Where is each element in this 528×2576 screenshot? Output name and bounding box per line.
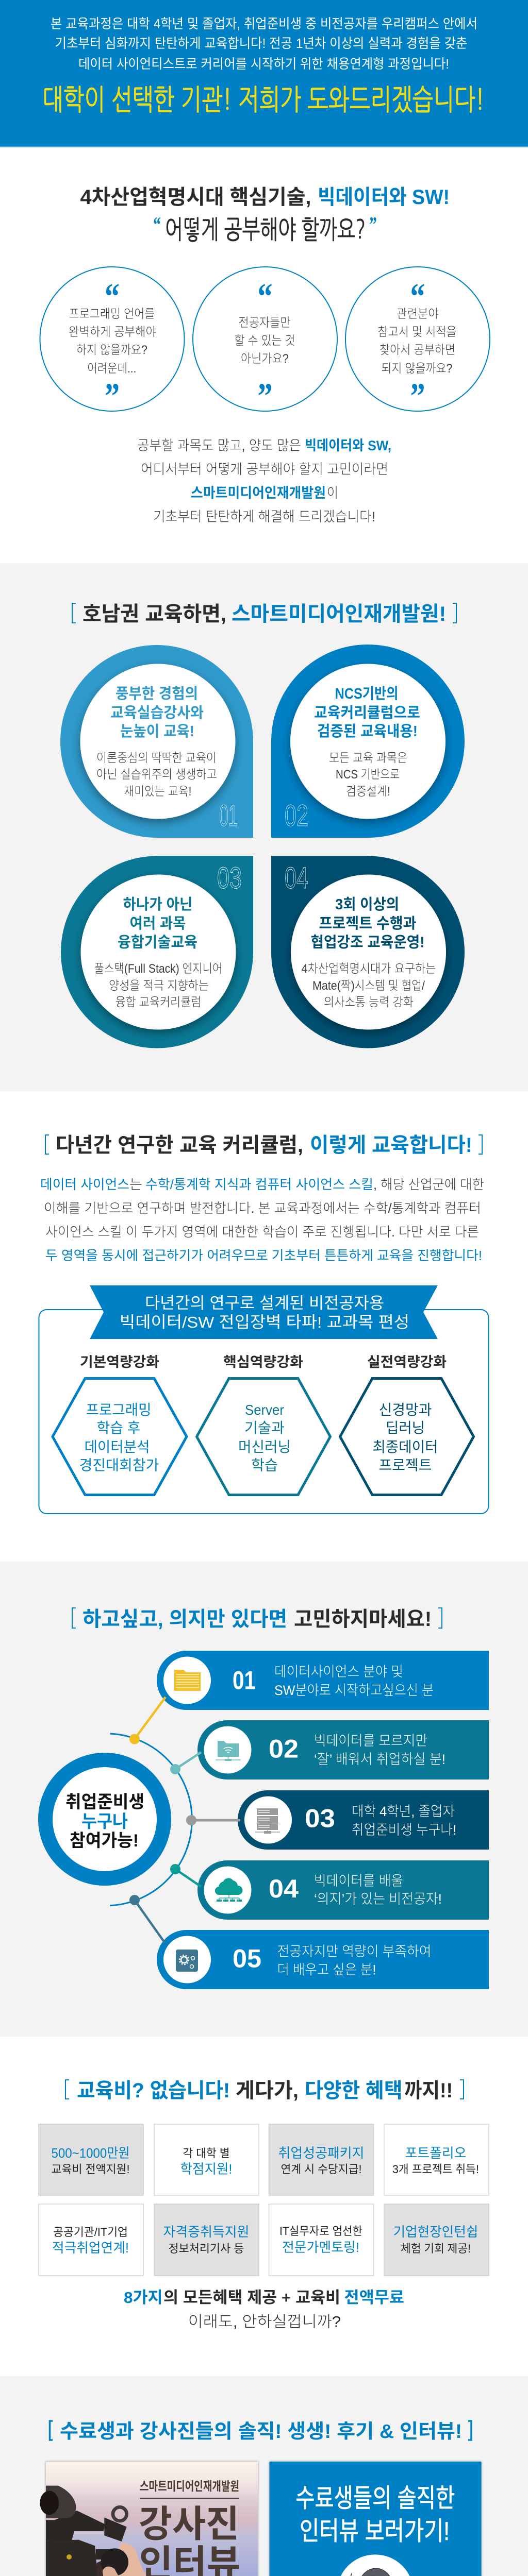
row 02: 빅데이터를 모르지만	[314, 1733, 427, 1749]
question bubble 3: 찾아서 공부하면	[380, 343, 455, 357]
section heading	[45, 1134, 482, 1157]
icon: server	[255, 1808, 280, 1834]
center badge: 참여가능!	[70, 1831, 139, 1851]
section heading: 이렇게 교육합니다!	[310, 1134, 472, 1157]
column: practical skills: 실전역량강화	[367, 1354, 447, 1370]
card 03: 융합 교육커리큘럼	[116, 995, 201, 1009]
handwritten caption: 수료생들의 솔직한	[295, 2484, 455, 2513]
question bubble 3: “	[410, 276, 425, 317]
benefit 5	[39, 2204, 143, 2276]
question bubble 2: “	[258, 276, 272, 317]
closing paragraph: 이	[327, 485, 338, 501]
section heading: 빅데이터와 SW!	[318, 186, 450, 209]
card 01	[60, 645, 253, 838]
benefits summary: 전액무료	[344, 2289, 404, 2307]
benefit 6: 자격증취득지원	[163, 2224, 250, 2240]
row 01: 01	[233, 1666, 256, 1695]
section heading: 다년간 연구한 교육 커리큘럼,	[56, 1134, 303, 1157]
card 02	[271, 645, 465, 838]
benefit 8	[384, 2204, 489, 2276]
column: core skills: Server	[245, 1402, 284, 1418]
section heading: 게다가,	[236, 2079, 299, 2102]
section heading: 수료생과 강사진들의 솔직! 생생! 후기 & 인터뷰!	[60, 2421, 462, 2443]
poster text: 강사진	[139, 2504, 239, 2545]
center badge: 누구나	[81, 1812, 128, 1832]
benefit 5: 공공기관/IT기업	[53, 2226, 128, 2239]
closing paragraph: 스마트미디어인재개발원	[191, 485, 326, 501]
question bubble 3: 관련분야	[397, 307, 439, 321]
benefits summary: 8가지	[124, 2289, 163, 2307]
column: practical skills	[340, 1354, 473, 1495]
column: basic skills: 경진대회참가	[79, 1457, 159, 1473]
card 01: 풍부한 경험의	[116, 685, 198, 702]
question bubble 3: 참고서 및 서적을	[377, 325, 457, 339]
curriculum description: 는	[129, 1177, 142, 1192]
column: core skills: 머신러닝	[238, 1439, 291, 1455]
card 02: 검증된 교육내용!	[317, 723, 418, 740]
benefit 2: 각 대학 별	[183, 2147, 230, 2160]
benefit 4	[384, 2124, 489, 2195]
column: core skills	[197, 1354, 330, 1495]
section heading	[72, 603, 456, 625]
card 04: 4차산업혁명시대가 요구하는	[301, 962, 436, 976]
row 03	[238, 1790, 489, 1850]
card 02: NCS기반의	[335, 685, 398, 702]
benefits summary: 이래도, 안하실껍니까?	[188, 2313, 341, 2331]
row 03: 03	[305, 1804, 335, 1833]
curriculum description: 데이터 사이언스	[40, 1177, 129, 1192]
section heading: 4차산업혁명시대 핵심기술,	[80, 186, 311, 209]
card 02: 검증설계!	[346, 785, 390, 799]
handwritten question: “	[153, 213, 161, 237]
column: basic skills: 프로그래밍	[86, 1402, 152, 1418]
closing paragraph: 기초부터 탄탄하게 해결해 드리겠습니다!	[153, 509, 375, 524]
curriculum frame	[39, 1310, 489, 1514]
benefit 2	[154, 2124, 259, 2195]
question bubble 1: 하지 않을까요?	[76, 343, 147, 357]
card 01: 재미있는 교육!	[124, 785, 192, 799]
section heading: 스마트미디어인재개발원!	[232, 603, 446, 625]
card 03: 풀스택(Full Stack) 엔지니어	[94, 962, 223, 976]
section: strengths	[0, 563, 528, 1091]
card 04: Mate(짝)시스템 및 협업/	[312, 979, 425, 993]
card 01: 01	[219, 799, 238, 833]
benefit 4: 3개 프로젝트 취득!	[392, 2163, 479, 2176]
handwritten question	[153, 213, 377, 243]
card 03: 하나가 아닌	[123, 896, 193, 913]
row 05	[157, 1930, 489, 1989]
icon: network folder	[216, 1741, 241, 1761]
section: curriculum	[39, 1134, 489, 1514]
row 05: 더 배우고 싶은 분!	[277, 1962, 376, 1977]
column: basic skills	[53, 1354, 187, 1495]
icon: cloud network	[215, 1878, 242, 1902]
question bubble 2: 전공자들만	[238, 316, 291, 330]
benefit 7: IT실무자로 엄선한	[279, 2225, 362, 2238]
section heading	[72, 1608, 442, 1631]
column: practical skills: 딥러닝	[386, 1420, 425, 1436]
card 01: 아닌 실습위주의 생생하고	[96, 768, 217, 782]
card 04: 04	[285, 861, 308, 895]
question bubble 2	[193, 267, 337, 417]
photo: camera operator	[40, 2486, 240, 2576]
row 02: ‘잘’ 배워서 취업하실 분!	[314, 1752, 446, 1767]
card 03	[61, 856, 253, 1048]
ribbon banner	[90, 1285, 438, 1339]
row 05: 05	[233, 1944, 261, 1973]
question bubble 1: 완벽하게 공부해야	[69, 325, 156, 339]
column: core skills: 기술과	[244, 1420, 285, 1436]
benefit 8: 체험 기회 제공!	[401, 2242, 471, 2255]
benefit 5: 적극취업연계!	[52, 2240, 129, 2256]
interview poster: graduates	[269, 2462, 482, 2576]
section heading	[65, 2079, 464, 2102]
benefit 2: 학점지원!	[180, 2161, 232, 2177]
column: basic skills: 기본역량강화	[80, 1354, 159, 1370]
question bubble 2: ”	[258, 376, 272, 417]
row 04	[197, 1860, 489, 1920]
closing paragraph: 공부할 과목도 많고, 양도 많은	[137, 438, 301, 453]
row 01: SW분야로 시작하고싶으신 분	[274, 1683, 434, 1698]
benefit 7	[269, 2204, 373, 2276]
connector lines and dots	[129, 1697, 240, 1943]
column: core skills: 핵심역량강화	[223, 1354, 303, 1370]
question bubble 1	[40, 267, 185, 417]
closing paragraph: 어디서부터 어떻게 공부해야 할지 고민이라면	[141, 462, 388, 477]
benefit 4: 포트폴리오	[405, 2145, 466, 2161]
poster text: 스마트미디어인재개발원	[140, 2480, 239, 2494]
column: core skills: 학습	[251, 1457, 278, 1473]
section heading: 하고싶고, 의지만 있다면	[82, 1608, 287, 1631]
icon: gears	[176, 1950, 198, 1972]
question bubble 1: 프로그래밍 언어를	[69, 307, 155, 321]
card 03: 여러 과목	[130, 915, 186, 932]
card 04: 협업강조 교육운영!	[310, 934, 425, 951]
section: benefits	[39, 2079, 489, 2331]
section heading: 호남권 교육하면,	[82, 603, 226, 625]
card 02: 교육커리큘럼으로	[314, 704, 420, 721]
card 01: 이론중심의 딱딱한 교육이	[96, 751, 217, 765]
section heading: 고민하지마세요!	[294, 1608, 432, 1631]
hero panel	[0, 0, 528, 147]
curriculum description: , 해당 산업군에 대한	[373, 1177, 484, 1192]
connector arc	[110, 1734, 192, 1906]
benefit 3: 연계 시 수당지급!	[280, 2163, 362, 2176]
section heading: 까지!!	[404, 2079, 453, 2102]
benefit 1: 교육비 전액지원!	[52, 2163, 130, 2176]
hero intro text	[51, 16, 477, 72]
illustration: graduates	[275, 2554, 473, 2576]
benefit 1	[39, 2124, 143, 2195]
row 04: ‘의지’가 있는 비전공자!	[314, 1891, 442, 1907]
row 01	[157, 1651, 489, 1710]
benefits summary	[124, 2289, 404, 2331]
center badge	[45, 1760, 164, 1878]
card 02: 모든 교육 과목은	[329, 751, 407, 765]
handwritten caption	[295, 2484, 455, 2546]
row 02: 02	[269, 1734, 299, 1763]
benefit 3: 취업성공패키지	[278, 2145, 364, 2161]
curriculum description: 두 영역을 동시에 접근하기가 어려우므로 기초부터 튼튼하게 교육을 진행합니다!	[45, 1248, 482, 1263]
curriculum description	[40, 1177, 484, 1263]
card 04	[271, 856, 465, 1048]
question bubble 2: 할 수 있는 것	[234, 334, 295, 348]
handwritten caption: 인터뷰 보러가기!	[300, 2517, 450, 2546]
question bubble 3	[345, 267, 490, 417]
question bubble 3: ”	[410, 376, 425, 417]
card 01: 교육실습강사와	[110, 704, 204, 721]
closing paragraph: 빅데이터와 SW,	[305, 438, 391, 453]
column: practical skills: 프로젝트	[378, 1457, 432, 1473]
hero intro text: 데이터 사이언티스트로 커리어를 시작하기 위한 채용연계형 과정입니다!	[78, 56, 449, 72]
benefit 6	[154, 2204, 259, 2276]
benefit 7: 전문가멘토링!	[282, 2240, 359, 2255]
section heading: 다양한 혜택	[305, 2079, 402, 2102]
question bubble 2: 아닌가요?	[241, 352, 289, 366]
card 04: 프로젝트 수행과	[319, 915, 417, 932]
card 02: 02	[285, 799, 308, 833]
curriculum description: 사이언스 스킬 이 두가지 영역에 대한한 학습이 주로 진행됩니다. 다만 서로 다른	[45, 1224, 479, 1240]
interview poster: instructors	[40, 2462, 258, 2576]
card 03: 03	[217, 861, 242, 895]
poster text	[139, 2480, 240, 2576]
section: how to study	[40, 186, 490, 524]
row 04: 빅데이터를 배울	[314, 1873, 403, 1889]
row 03: 취업준비생 누구나!	[352, 1822, 456, 1838]
icon: folder	[174, 1670, 201, 1691]
curriculum description: 이해를 기반으로 연구하며 발전합니다. 본 교육과정에서는 수학/통계학과 컴퓨터	[44, 1200, 481, 1216]
row 01: 데이터사이언스 분야 및	[274, 1664, 403, 1680]
question bubble 1: ”	[105, 376, 120, 417]
closing paragraph	[137, 438, 391, 524]
ribbon banner: 다년간의 연구로 설계된 비전공자용	[145, 1294, 384, 1312]
card 03: 융합기술교육	[118, 934, 197, 951]
benefit 1: 500~1000만원	[52, 2145, 130, 2161]
section heading: 교육비? 없습니다!	[77, 2079, 230, 2102]
section: interviews	[0, 2376, 528, 2576]
card 04: 의사소통 능력 강화	[324, 995, 414, 1009]
benefits summary: 의 모든혜택 제공 + 교육비	[163, 2289, 340, 2307]
card 04: 3회 이상의	[335, 896, 399, 913]
ribbon banner: 빅데이터/SW 전입장벽 타파! 교과목 편성	[120, 1313, 409, 1331]
row 03: 대학 4학년, 졸업자	[352, 1804, 455, 1819]
card 01: 눈높이 교육!	[120, 723, 194, 740]
section heading	[80, 186, 450, 209]
question bubble 3: 되지 않을까요?	[382, 362, 453, 376]
benefit 6: 정보처리기사 등	[168, 2242, 244, 2255]
section: target audience	[0, 1562, 528, 2037]
row 02	[197, 1720, 489, 1780]
hero intro text: 기초부터 심화까지 탄탄하게 교육합니다! 전공 1년차 이상의 실력과 경험을 갖춘	[55, 36, 467, 51]
question bubble 1: 어려운데...	[88, 362, 136, 376]
column: basic skills: 학습 후	[97, 1420, 140, 1436]
benefit 8: 기업현장인턴쉽	[393, 2224, 478, 2240]
handwritten question: ”	[369, 213, 377, 237]
column: practical skills: 최종데이터	[372, 1439, 438, 1455]
curriculum description: 수학/통계학 지식과 컴퓨터 사이언스 스킬	[145, 1177, 373, 1192]
handwritten question: 어떻게 공부해야 할까요?	[165, 217, 366, 243]
hero intro text: 본 교육과정은 대학 4학년 및 졸업자, 취업준비생 중 비전공자를 우리캠퍼스 안에서	[51, 16, 477, 31]
center badge: 취업준비생	[65, 1792, 144, 1812]
benefit 3	[269, 2124, 373, 2195]
row 04: 04	[269, 1874, 299, 1903]
question bubble 1: “	[105, 276, 120, 317]
column: basic skills: 데이터분석	[85, 1439, 150, 1455]
card 02: NCS 기반으로	[336, 768, 400, 782]
row 05: 전공자지만 역량이 부족하여	[277, 1944, 431, 1959]
column: practical skills: 신경망과	[378, 1402, 432, 1418]
card 03: 양성을 적극 지향하는	[109, 979, 209, 993]
